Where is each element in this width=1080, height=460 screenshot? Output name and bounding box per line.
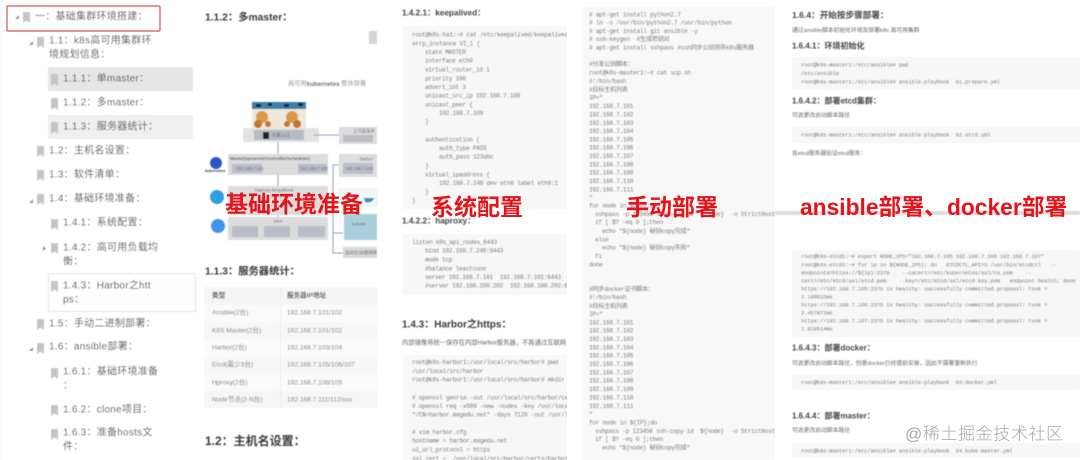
- sidebar entries: ：: [63, 380, 73, 392]
- sidebar entries: 1.1.2：多master：: [63, 96, 149, 108]
- sidebar entries: 1.1：k8s高可用集群环: [49, 34, 152, 46]
- code block: haproxy: server 192.168.7.101 192.168.7.101:6443 check: [425, 274, 585, 281]
- sidebar entries: [35, 10, 158, 452]
- code block: etcd health: 2.457971ms: [801, 310, 833, 316]
- code block: prepare: root@k8s-master1:/etc/ansible# pwd: [801, 62, 908, 68]
- script lines: 192.168.7.110: [589, 394, 634, 402]
- heading: 1.6.4: 1.6.4：开始按步骤部署：: [792, 9, 888, 20]
- sidebar entries: 1.4.3：Harbor之htt: [63, 278, 151, 292]
- paragraph: 各etcd服务器验证etcd服务：: [792, 149, 866, 157]
- code block: haproxy: mode tcp: [425, 256, 453, 264]
- code block: keepalived: }: [425, 118, 429, 126]
- sidebar entries: 境规划信息：: [49, 48, 110, 60]
- server table: 192.168.7.101/102: [287, 328, 342, 334]
- overlay label: ansible and docker deployment: ansible部署、docker部署: [800, 194, 1067, 220]
- script lines: sshpass -p 123456 ssh-copy-id ${node} -o StrictHostKe: [595, 428, 782, 435]
- server table: 192.168.7.105/106/107: [287, 362, 355, 368]
- code block: etcd health: https://192.168.7.106:2379 is healthy: successfully committed proposal: took =: [801, 302, 1048, 308]
- script lines: echo "${node} 秘钥copy失败": [602, 244, 690, 252]
- server table: 192.168.7.101/102: [287, 310, 342, 316]
- script lines: #!/bin/bash: [589, 78, 627, 85]
- script lines: 192.168.7.109: [589, 386, 634, 393]
- server table: 192.168.7.103/104: [287, 344, 342, 352]
- code block: etcd health: https://192.168.7.105:2379 is healthy: successfully committed proposal: took =: [801, 286, 1048, 292]
- heading: 1.4.2.1: 1.4.2.1：keepalived：: [402, 8, 485, 18]
- code block: keepalived: priority 100: [425, 76, 466, 82]
- script lines: for node in ${IP};do: [589, 202, 657, 210]
- script lines: # apt-get install python2.7: [589, 12, 681, 18]
- code block: etcd: root@k8s-master1:/etc/ansible# ansible-playbook 02.etcd.yml: [801, 132, 991, 138]
- sidebar entries: 件：: [63, 440, 84, 452]
- script lines: sshpass -p 123456 ssh-copy-id ${node} -o StrictHostKe: [595, 211, 782, 218]
- code block: master: root@k8s-master1:/etc/ansible# ansible-playbook 04.kube-master.yml: [801, 448, 1013, 454]
- overlay label: system configuration: 系统配置: [431, 194, 523, 220]
- panel: system configuration: [402, 8, 586, 460]
- code block: harbor: # openssl req -x509 -new -nodes -key /usr/local/src: [412, 403, 586, 410]
- code block: docker: [792, 374, 1080, 390]
- script lines: 192.168.7.109: [589, 170, 634, 176]
- server table: Harbor(2台): [212, 342, 247, 352]
- bookmark icons: [23, 12, 58, 440]
- script lines: #!/bin/bash: [589, 294, 627, 301]
- code block: keepalived: interface eth0: [425, 58, 473, 64]
- script lines: if [ $? -eq 0 ];then: [595, 436, 663, 443]
- script lines: for node in ${IP};do: [589, 420, 657, 426]
- paragraph: 通过ansible脚本初始化环境及部署k8s 高可用集群: [792, 26, 920, 34]
- haproxy box: [228, 186, 328, 215]
- code block: keepalived: 192.168.7.109: [439, 110, 484, 117]
- scroll thumb: [369, 31, 377, 44]
- script lines: 192.168.7.110: [589, 178, 634, 185]
- master box: [228, 154, 328, 175]
- script lines: 192.168.7.102: [589, 328, 634, 334]
- heading: 1.6.4.3: 1.6.4.3：部署docker：: [792, 342, 875, 352]
- highlight box: 1.4.3: [48, 274, 196, 312]
- panel: multi-master and server statistics: [204, 10, 378, 448]
- server table: 192.168.7.111/112/xxx: [287, 396, 353, 404]
- script lines: # apt-get install sshpass #ssh同步公钥到各k8s服务器: [589, 44, 755, 52]
- code block: harbor: # openssl genrsa -out /usr/local/src/harbor/certs: [412, 394, 579, 402]
- code block: keepalived: auth_type PASS: [439, 145, 487, 152]
- script lines: 192.168.7.101: [589, 320, 634, 326]
- code block: etcd health: 1.819514ms: [801, 326, 833, 332]
- code block: harbor: # vim harbor.cfg: [412, 429, 467, 436]
- server table: K8S Master(2台): [212, 326, 261, 334]
- script lines: done: [589, 262, 603, 268]
- script lines: echo "${node} 秘钥copy完成": [602, 227, 690, 235]
- sidebar entries: 1.6.3：准备hosts文: [63, 426, 153, 438]
- code block: keepalived: virtual_ipaddress {: [425, 172, 490, 178]
- etcd logo: [211, 219, 225, 233]
- script lines: #分发公钥脚本：: [589, 60, 633, 68]
- script lines: #目标主机列表: [589, 86, 628, 94]
- code block: keepalived: virtual_router_id 1: [425, 66, 490, 74]
- sidebar entries: 1.2：主机名设置：: [49, 144, 135, 156]
- heading: 1.6.4.4: 1.6.4.4：部署master：: [792, 410, 875, 420]
- script lines: 192.168.7.104: [589, 128, 634, 135]
- script lines: if [ $? -eq 0 ];then: [595, 219, 663, 226]
- sidebar entries: 1.6.1：基础环境准备: [63, 364, 158, 378]
- script lines: 192.168.7.111: [589, 186, 634, 194]
- script lines: # ssh-keygen #生成密钥对: [589, 35, 669, 43]
- overlay label: base environment: 基础环境准备: [225, 191, 363, 217]
- script lines: 192.168.7.103: [589, 120, 634, 127]
- code block: keepalived: vrrp_instance VI_1 {: [412, 40, 480, 48]
- code block: keepalived: authentication {: [425, 136, 480, 144]
- script lines: fi: [595, 253, 602, 260]
- architecture diagram: harbor: [360, 156, 373, 162]
- architecture diagram: haproxy-keepalived: [255, 188, 294, 192]
- code block: docker: root@k8s-master1:/etc/ansible# ansible-playbook 03.docker.yml: [801, 379, 998, 386]
- gateway box: [243, 128, 319, 142]
- code block: keepalived: root@k8s-ha1:~# cat /etc/keepalived/keepalived.conf: [412, 32, 586, 38]
- script lines: 192.168.7.106: [589, 361, 634, 368]
- sidebar entries: 1.3：软件清单：: [49, 168, 125, 180]
- script lines: 192.168.7.108: [589, 378, 634, 384]
- sidebar entries: 衡：: [63, 256, 84, 268]
- script lines: # ln -s /usr/bin/python2.7 /usr/bin/python: [589, 20, 732, 26]
- code block: etcd: [792, 126, 1080, 143]
- code block: etcd health: root@k8s-etcd1:~# export NODE_IPS="192.168.7.105 192.168.7.106 192.168.7.107": [801, 253, 1044, 260]
- code block: keepalived: state MASTER: [425, 49, 466, 56]
- architecture diagram: Master(apiserver/controller/scheduler): [230, 156, 311, 161]
- lower box: [343, 247, 377, 258]
- code block: harbor: "/CN=harbor.magedu.net" -days 7120 -out /usr/local: [412, 412, 582, 418]
- paragraph: 可选更改启动脚本路径: [792, 426, 850, 434]
- script lines: IP=": [589, 311, 603, 318]
- script lines: ": [589, 411, 592, 418]
- code block: keepalived: 192.168.7.248 dev eth0 label eth0:1: [439, 180, 558, 187]
- script lines: 192.168.7.107: [589, 370, 634, 376]
- photo strip: [252, 108, 306, 128]
- script lines: 192.168.7.103: [589, 336, 634, 343]
- code block: prepare: [792, 57, 1080, 90]
- code block: etcd health: https://192.168.7.107:2379 is healthy: successfully committed proposal: took =: [801, 318, 1048, 324]
- code block: etcd health: [792, 250, 1080, 337]
- sidebar entries: 1.1.3：服务器统计：: [63, 120, 158, 132]
- highlight band: 1.1.3: [48, 115, 193, 139]
- code block: keepalived: }: [425, 188, 429, 196]
- divider band: [775, 211, 1080, 215]
- sidebar entries: 1.4.1：系统配置：: [63, 216, 148, 228]
- script lines: [589, 12, 782, 452]
- heading: 1.4.3: 1.4.3：Harbor之https：: [402, 318, 511, 330]
- harbor box: [339, 154, 377, 177]
- script lines: #同步docker证书脚本：: [589, 285, 654, 293]
- code block: haproxy: [412, 238, 567, 288]
- architecture diagram: kubernetes: [205, 169, 225, 173]
- sidebar entries: 1.4.2：高可用负载均: [63, 240, 158, 254]
- highlight band: 1.1.1: [48, 67, 193, 91]
- watermark: @稀土掘金技术社区: [905, 424, 1064, 444]
- code block: harbor: ui_url_protocol = https: [412, 446, 491, 454]
- architecture diagram: kubelet: [352, 222, 367, 226]
- code block: keepalived: }: [412, 198, 416, 204]
- script lines: 192.168.7.101: [589, 103, 634, 110]
- code block: harbor: root@k8s-harbor1:/usr/local/src/harbor# pwd: [412, 359, 559, 366]
- script lines: 192.168.7.102: [589, 112, 634, 118]
- heading: 1.1.2: 1.1.2：多master：: [205, 10, 293, 24]
- kubelet box: [344, 214, 377, 240]
- script lines: IP=": [589, 94, 603, 102]
- heading: 1.4.2.2: 1.4.2.2：haproxy：: [402, 216, 475, 226]
- heading: 1.1.3: 1.1.3：服务器统计：: [205, 264, 300, 278]
- server table: [204, 287, 378, 408]
- script lines: ": [589, 194, 592, 202]
- server table: Etcd(最少3台): [212, 360, 253, 368]
- sidebar entries: 一：基础集群环境搭建：: [35, 10, 148, 22]
- code block: harbor: root@k8s-harbor1:/usr/local/src/harbor# mkdir certs: [412, 376, 586, 384]
- code block: keepalived: advert_int 3: [425, 84, 466, 91]
- code block: keepalived: unicast_src_ip 192.168.7.108: [425, 92, 521, 100]
- sidebar entries: 1.6.2：clone项目：: [63, 404, 153, 416]
- architecture diagram: 192.168.7.103: [345, 166, 374, 171]
- heading: 1.2: 1.2：主机名设置：: [205, 433, 306, 448]
- code block: etcd health: 2.198515ms: [801, 294, 833, 300]
- code block: harbor: [411, 358, 567, 460]
- kubernetes logo: [210, 157, 222, 169]
- sidebar entries: 1.4：基础环境准备：: [49, 192, 146, 204]
- heading: 1.6.4.1: 1.6.4.1：环境初始化: [792, 40, 864, 50]
- panel: table of contents sidebar: [0, 0, 196, 460]
- code block: keepalived: auth_pass 123abc: [439, 154, 494, 160]
- script lines: echo "${node} 秘钥copy完成": [602, 444, 690, 452]
- code block: prepare: /etc/ansible: [801, 70, 839, 77]
- sidebar entries: ps：: [63, 294, 84, 306]
- etcd box: [228, 217, 328, 240]
- architecture diagram: etcd: [274, 218, 283, 224]
- script lines: 192.168.7.104: [589, 344, 634, 352]
- code block: haproxy: listen k8s_api_nodes_6443: [412, 239, 497, 246]
- connectors: [278, 135, 343, 253]
- server table: 类型: [212, 290, 226, 300]
- code block: keepalived: unicast_peer {: [425, 102, 473, 108]
- script lines: else: [595, 236, 609, 244]
- architecture diagram: 自动化/运维网络: [345, 249, 378, 256]
- script lines: 192.168.7.106: [589, 144, 634, 152]
- architecture diagram: 上马促发补: [353, 128, 376, 134]
- code block: haproxy: #balance leastconn: [425, 266, 487, 272]
- overlay label: manual deployment: 手动部署: [626, 194, 718, 220]
- code block: haproxy: bind 192.168.7.248:6443: [425, 248, 504, 254]
- code block: haproxy: #server 192.168.100.202 192.168.100.202:6443: [425, 282, 578, 290]
- script lines: 192.168.7.107: [589, 153, 634, 160]
- server table: 服务器IP地址: [287, 290, 327, 300]
- server table: 192.168.7.108/109: [287, 380, 342, 386]
- script lines: 192.168.7.111: [589, 403, 634, 410]
- panel: ansible and docker deployment: [775, 9, 1080, 458]
- architecture diagram: 192.168.7.101: [236, 166, 265, 171]
- haproxy logo: [210, 190, 224, 204]
- red highlight box around first entry: [7, 6, 160, 31]
- script lines: 192.168.7.108: [589, 162, 634, 168]
- panel: manual deployment script: [582, 7, 782, 460]
- paragraph: 内部镜像将统一保存在内部Harbor服务器，不再通过互联网: [402, 338, 566, 346]
- script lines: 192.168.7.105: [589, 136, 634, 144]
- architecture diagram: 192.168.7.102: [300, 166, 329, 171]
- paragraph: 可选更改启动脚本路径: [792, 111, 850, 119]
- script lines: #目标主机列表: [589, 302, 628, 310]
- code block: master: [792, 443, 1080, 458]
- server table: Ansible(2台): [212, 308, 248, 316]
- diagram caption: 高可用kubernetes 整体部署: [288, 80, 366, 88]
- code block: etcd health: root@k8s-etcd1:~# for ip in ${NODE_IPS}; do ETCDCTL_API=3 /usr/bin/etcdctl --: [801, 262, 1057, 268]
- architecture diagram: [205, 102, 378, 258]
- expand triangles: [15, 15, 46, 351]
- code block: keepalived: }: [425, 162, 429, 170]
- upstream box: [339, 127, 377, 144]
- code block: etcd health: endpoints=https://${ip}:2379 --cacert=/etc/kubernetes/ssl/ca.pem --: [801, 270, 1031, 276]
- script lines: 192.168.7.105: [589, 352, 634, 360]
- server table: Node节点(2-N台): [212, 394, 263, 404]
- sidebar entries: 1.5：手动二进制部署：: [49, 316, 156, 330]
- sidebar entries: 1.1.1：单master：: [63, 72, 149, 84]
- code block: keepalived: [411, 31, 567, 205]
- code block: etcd health: cert=/etc/etcd/ssl/etcd.pem --key=/etc/etcd/ssl/etcd-key.pem endpoint health; done: [801, 278, 1076, 284]
- script lines: root@k8s-master1:~# cat scp.sh: [589, 70, 691, 76]
- docker box: [339, 189, 377, 206]
- code block: harbor: /usr/local/src/harbor: [412, 368, 484, 375]
- paragraph: 可选更改启动脚本路径，但是docker已经提前安装，因此不需要重新执行: [792, 359, 978, 367]
- code block: harbor: hostname = harbor.magedu.net: [412, 438, 508, 444]
- sidebar entries: 1.6：ansible部署：: [49, 340, 138, 352]
- heading: 1.6.4.2: 1.6.4.2：部署etcd集群：: [792, 96, 881, 106]
- architecture diagram: 负载入口: [272, 132, 290, 138]
- server table: Hproxy(2台): [212, 378, 248, 386]
- script lines: # apt-get install git ansible -y: [589, 28, 698, 35]
- code block: prepare: root@k8s-master1:/etc/ansible# ansible-playbook 01.prepare.yml: [801, 78, 1001, 86]
